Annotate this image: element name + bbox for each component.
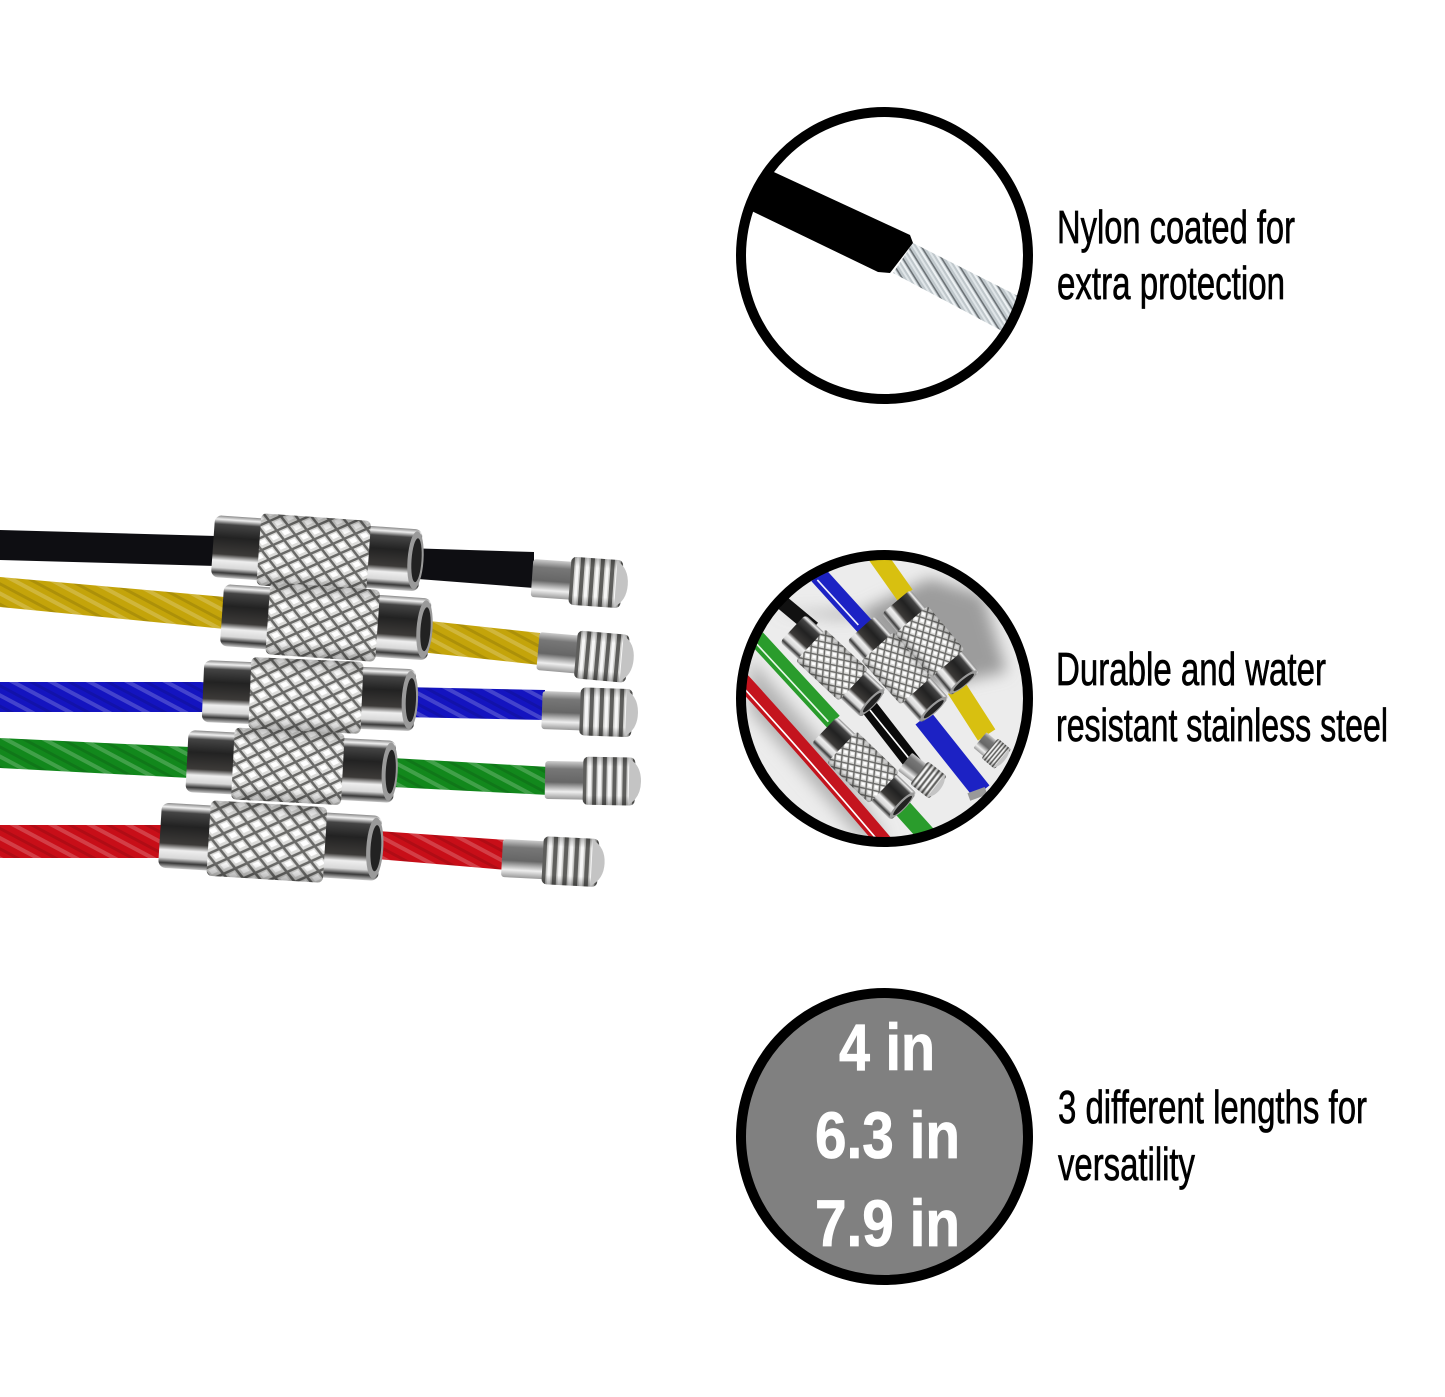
photo: five coloured cable ties with screw nuts <box>0 510 641 887</box>
cable tie: yellow <box>0 577 636 683</box>
feature 2: close-up of coloured cables circle <box>730 545 1040 855</box>
lengths list: 4 in <box>839 1010 935 1084</box>
green cable <box>757 638 833 722</box>
cable tie: red <box>0 797 606 887</box>
nuts <box>782 616 885 716</box>
lengths list: 6.3 in <box>815 1098 960 1172</box>
red cable <box>740 678 887 845</box>
feature 1: nylon coating circle <box>735 112 1028 399</box>
feature 1 text <box>1057 201 1295 309</box>
feature 2 text <box>1056 643 1388 751</box>
tips <box>898 753 946 798</box>
black cable <box>783 603 813 628</box>
blue cable <box>818 575 867 628</box>
black nylon sleeve <box>753 172 913 273</box>
feature 2 text: Durable and water <box>1056 643 1326 695</box>
cable tie: green <box>0 725 641 808</box>
feature 1 text: extra protection <box>1057 257 1285 309</box>
cable tie: black <box>0 510 629 609</box>
feature 3 text: versatility <box>1058 1138 1195 1190</box>
feature 3: lengths badge <box>741 993 1028 1280</box>
exposed steel strands <box>893 243 1020 332</box>
feature 3 text <box>1058 1081 1367 1190</box>
yellow cable <box>877 555 905 595</box>
lengths list: 7.9 in <box>815 1186 960 1260</box>
cable tie: blue <box>0 655 639 737</box>
feature 1 text: Nylon coated for <box>1057 201 1295 253</box>
lengths list <box>815 1010 960 1260</box>
